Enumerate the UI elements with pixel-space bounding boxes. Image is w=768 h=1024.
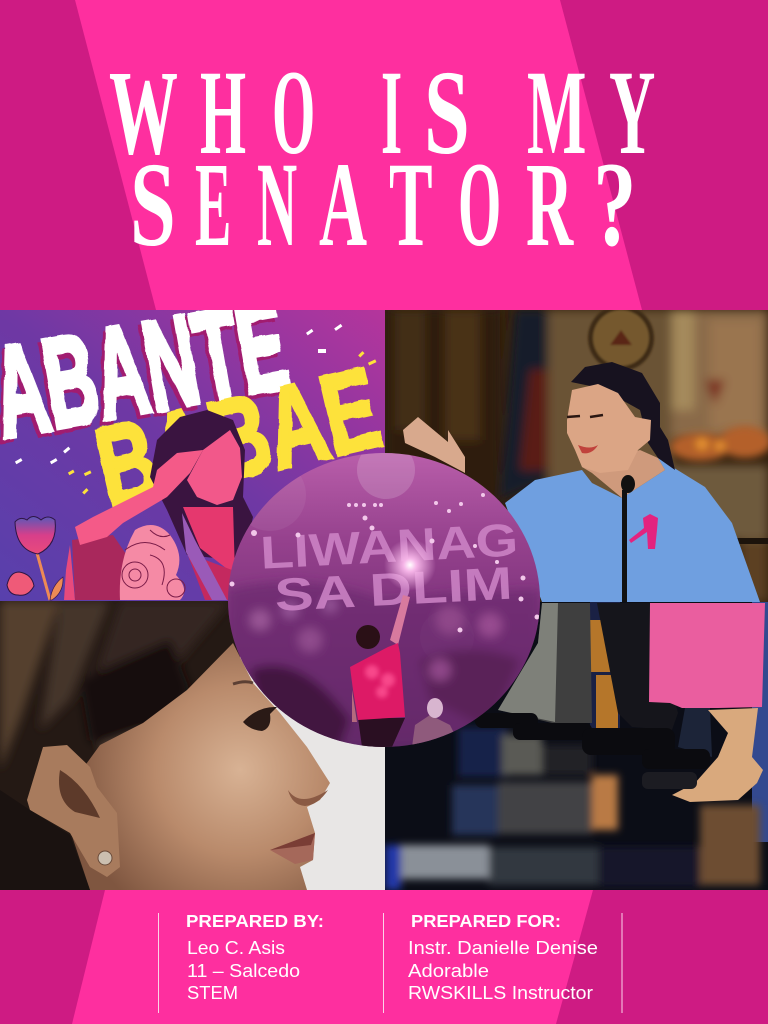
title: S: [130, 139, 176, 272]
slogan text: [263, 524, 516, 610]
title: ?: [593, 137, 637, 271]
blue dress: [505, 458, 760, 602]
text block: prepared for: Instr. Danielle Denise: [408, 938, 598, 958]
text block: prepared by: [186, 911, 324, 1003]
dark lower hair: [0, 790, 90, 890]
footer background: [0, 890, 768, 1024]
slogan word: ABANTE: [0, 310, 291, 444]
microphone: [621, 475, 635, 602]
title: E: [195, 138, 231, 272]
illustrated woman saluting: [72, 410, 253, 600]
title: H: [200, 45, 246, 180]
panel: Abante Babae illustration: [0, 310, 385, 601]
title: Y: [609, 46, 655, 179]
text block: prepared for: RWSKILLS Instructor: [408, 983, 593, 1003]
floor reflections: [385, 727, 760, 890]
title: R: [526, 138, 574, 272]
face skin: [60, 643, 330, 890]
panel: speaker in blue photo: [385, 305, 768, 602]
gray trousers: [498, 603, 592, 723]
illustrated tulips: [7, 516, 75, 600]
pearl earring: [98, 851, 112, 865]
text block: prepared for: Adorable: [408, 961, 489, 981]
wall seal: [588, 305, 654, 371]
footer dividers: [158, 913, 622, 1013]
crowd: [228, 582, 540, 747]
title: O: [458, 138, 501, 272]
masked supporter: [412, 698, 454, 744]
text block: prepared by: Leo C. Asis: [187, 938, 285, 958]
hair strands: [0, 601, 230, 775]
title: M: [527, 45, 586, 179]
nude legs and heels: [672, 708, 763, 802]
title: N: [257, 138, 297, 272]
title: W: [109, 46, 178, 180]
title: I: [381, 46, 402, 180]
stage lights dots: [230, 493, 540, 632]
navy trouser: [678, 708, 712, 757]
text block: prepared by: PREPARED BY:: [186, 911, 324, 931]
title: A: [319, 138, 367, 272]
panel: face close-up photo: [0, 601, 385, 890]
ear: [27, 745, 120, 877]
confetti dots: [15, 324, 376, 495]
text block: prepared for: [408, 911, 598, 1003]
header background: [0, 0, 768, 310]
panel: stage legs photo: [385, 602, 768, 890]
text block: prepared by: 11 – Salcedo: [187, 961, 300, 981]
eye and lips: [233, 682, 315, 864]
backdrop strip: [590, 602, 620, 732]
center circle: rally image: [228, 441, 540, 747]
waving hand: [403, 417, 465, 473]
title: S: [424, 47, 470, 180]
figure in pink shirt: [350, 595, 410, 747]
text block: prepared for: PREPARED FOR:: [411, 911, 561, 931]
pink ribbon: [629, 514, 658, 549]
text block: prepared by: STEM: [187, 983, 238, 1003]
title: [109, 45, 655, 272]
slogan word: BABAE: BABAE: [85, 344, 391, 532]
black shoes: [475, 713, 710, 789]
slogan text: SA DLIM: [273, 557, 514, 621]
lens bokeh: [250, 453, 415, 531]
light flare: [386, 540, 434, 590]
pink skirt: [649, 603, 765, 708]
title: T: [389, 138, 433, 272]
title: O: [272, 46, 315, 180]
dark trousers: [597, 603, 678, 730]
flowers on table: [670, 426, 768, 461]
slogan text: LIWANAG: [259, 513, 519, 579]
face and hair: [567, 362, 675, 498]
nose shadow: [288, 790, 328, 806]
